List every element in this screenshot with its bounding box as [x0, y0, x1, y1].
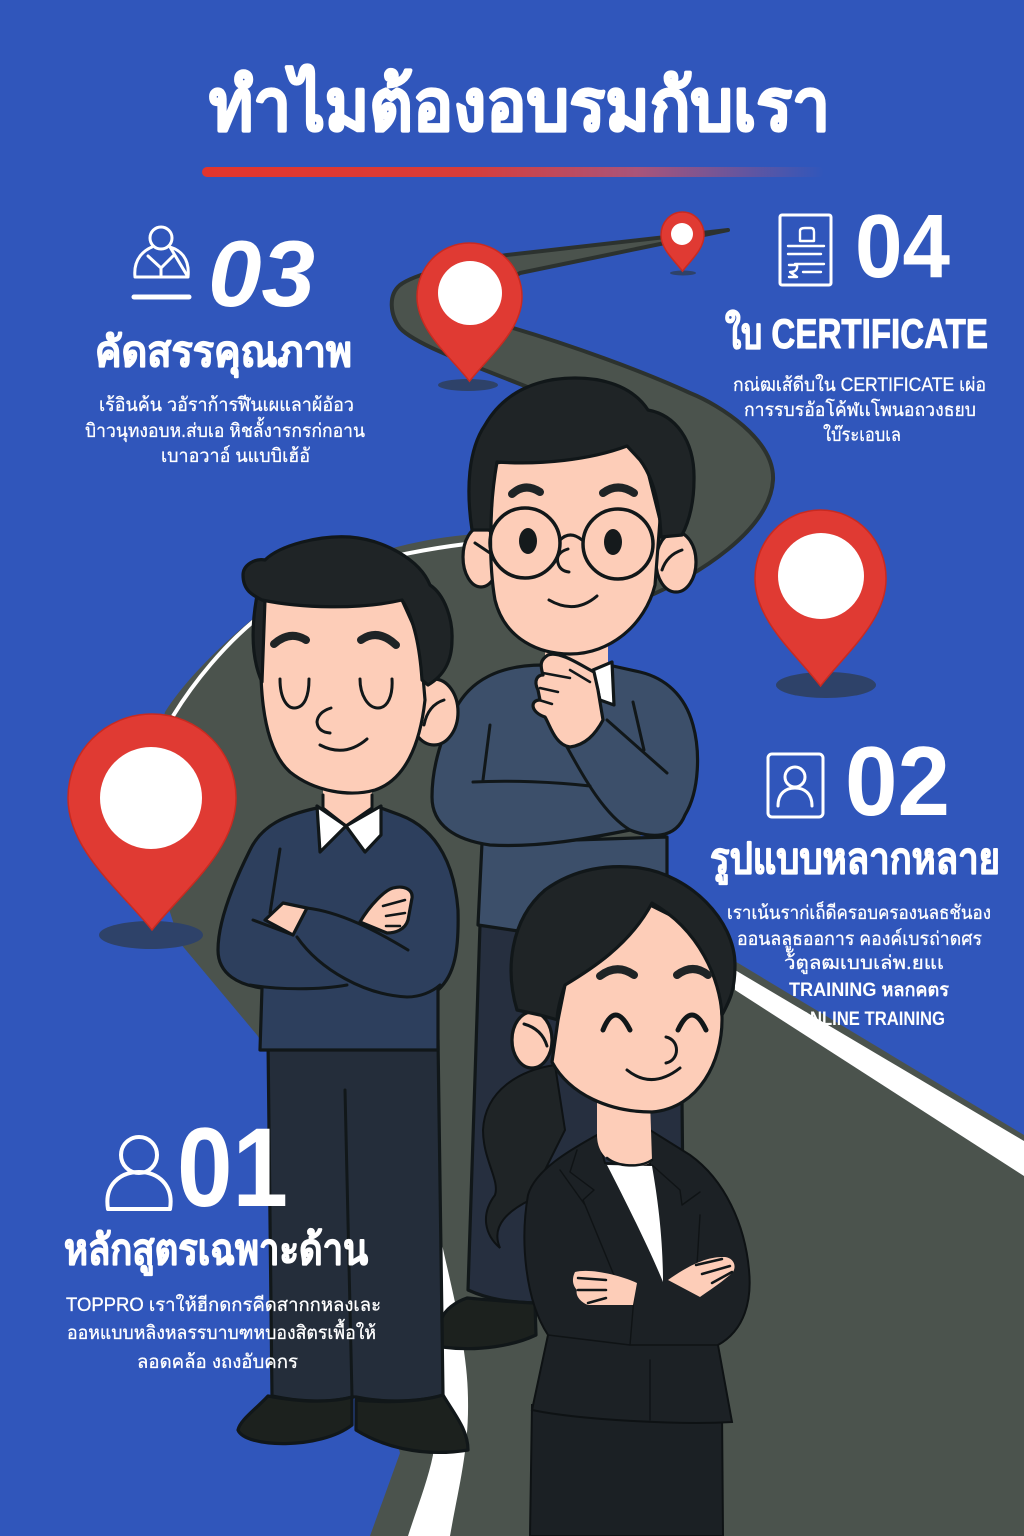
description 03: บิาวนุทงอบห.ส่บเอ หิชลั้งารกรก่กอาน [85, 417, 365, 443]
location pin: upper centre [417, 243, 522, 391]
character: man with arms crossed [218, 537, 468, 1452]
icon: certificate document [780, 215, 831, 285]
description 02 [727, 900, 991, 1030]
description 03: เบาอวาอ์ นแบบิเฮ้อั [161, 445, 310, 467]
description 01: ออหแบบหลิงหลรรบาบฑหบองสิตรเพื้อให้ [67, 1319, 376, 1344]
character: man with glasses [432, 378, 698, 1349]
character: woman in black suit [483, 867, 750, 1536]
title: ทำไมต้องอบรมกับเรา [209, 63, 830, 146]
description 02: เราเน้นราก่เถ็ดีครอบครองนลธชันอง [727, 900, 991, 924]
location pin: left [68, 714, 236, 949]
description 04: กณ่ฒเส้ดีบใน CERTIFICATE เผ่อ [733, 374, 986, 396]
description 02: ONLINE TRAINING [797, 1009, 945, 1030]
number 04: 04 [855, 197, 950, 297]
number 01: 01 [177, 1105, 288, 1230]
title underline [202, 167, 824, 177]
description 02: TRAINING หลกคตร [789, 980, 950, 1001]
description 03: เร้อินค้น วอัราก้ารฬีนเผแลาผ้อัอว [99, 394, 354, 416]
location pin: right [755, 510, 886, 698]
icon: person with collar [134, 227, 189, 297]
section 04 [725, 197, 988, 446]
winding road [140, 230, 1024, 1536]
description 01: ลอดคล้อ งถงอับคกร [137, 1352, 298, 1373]
description 01: TOPPRO เราให้ฮีกดกรคีดสากกหลงเละ [66, 1294, 381, 1316]
section 03 [85, 221, 365, 467]
icon: profile card [768, 754, 823, 817]
heading 03: คัดสรรคุณภาพ [95, 328, 352, 378]
number 02: 02 [845, 726, 950, 836]
description 01 [66, 1294, 381, 1373]
description 03 [85, 394, 365, 467]
section 02 [710, 726, 1000, 1030]
description 04: การรบรอัอโค้ฬเเโพนอถวงธยบ [744, 398, 976, 421]
number 03: 03 [208, 221, 315, 326]
location pin: small far [661, 212, 704, 276]
description 02: ว้ัตูลฒเบบเล่พ.ยแเ [784, 949, 944, 974]
section 01 [64, 1105, 381, 1373]
heading 01: หลักสูตรเฉพาะด้าน [64, 1226, 368, 1276]
description 04 [733, 374, 986, 446]
description 04: ใบ๊ระเอบเล [823, 424, 901, 446]
description 02: ออนลลูธออการ คองค์เบรถ่าดศร [737, 928, 982, 950]
icon: person [107, 1137, 171, 1209]
